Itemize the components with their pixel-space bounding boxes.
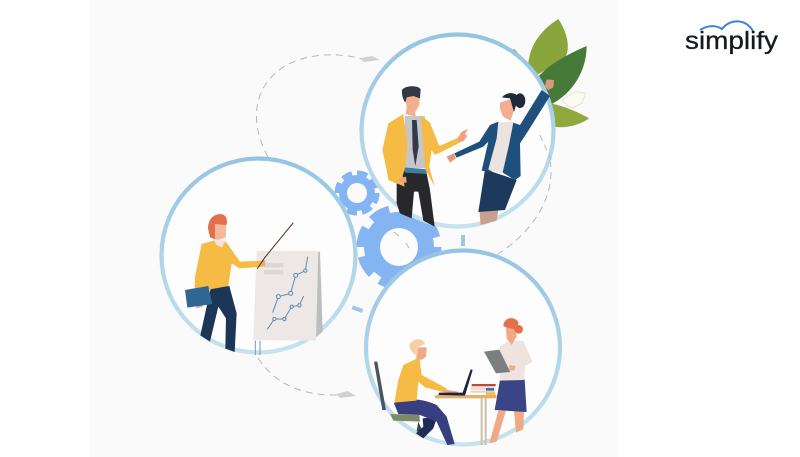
- dashed arrow: top: [256, 55, 380, 157]
- figure: woman with pointer: [185, 214, 293, 352]
- small gear: [337, 173, 377, 213]
- small blue dash marks: [352, 235, 465, 313]
- dashes inside circle: [540, 135, 551, 160]
- circle: team meeting: [362, 34, 554, 227]
- background panel: [90, 0, 618, 457]
- circle: presentation: [162, 158, 356, 355]
- logo wordmark: simplify: [685, 27, 779, 55]
- figure: desk and books: [435, 384, 497, 445]
- figure: flipchart: [253, 251, 323, 355]
- leaves: [513, 19, 589, 127]
- figure: standing woman with tablet: [484, 318, 533, 443]
- logo: simplify: [685, 21, 779, 55]
- figure: man in yellow blazer: [382, 86, 468, 227]
- figure: seated man with laptop: [374, 339, 473, 445]
- figure: woman with raised fist: [447, 79, 554, 225]
- circle: office work: [366, 250, 560, 445]
- large gear: [361, 209, 437, 285]
- dashed arrow: right: [498, 160, 551, 254]
- logo cloud arc: [700, 21, 753, 31]
- dashed arrow: bottom: [258, 358, 356, 398]
